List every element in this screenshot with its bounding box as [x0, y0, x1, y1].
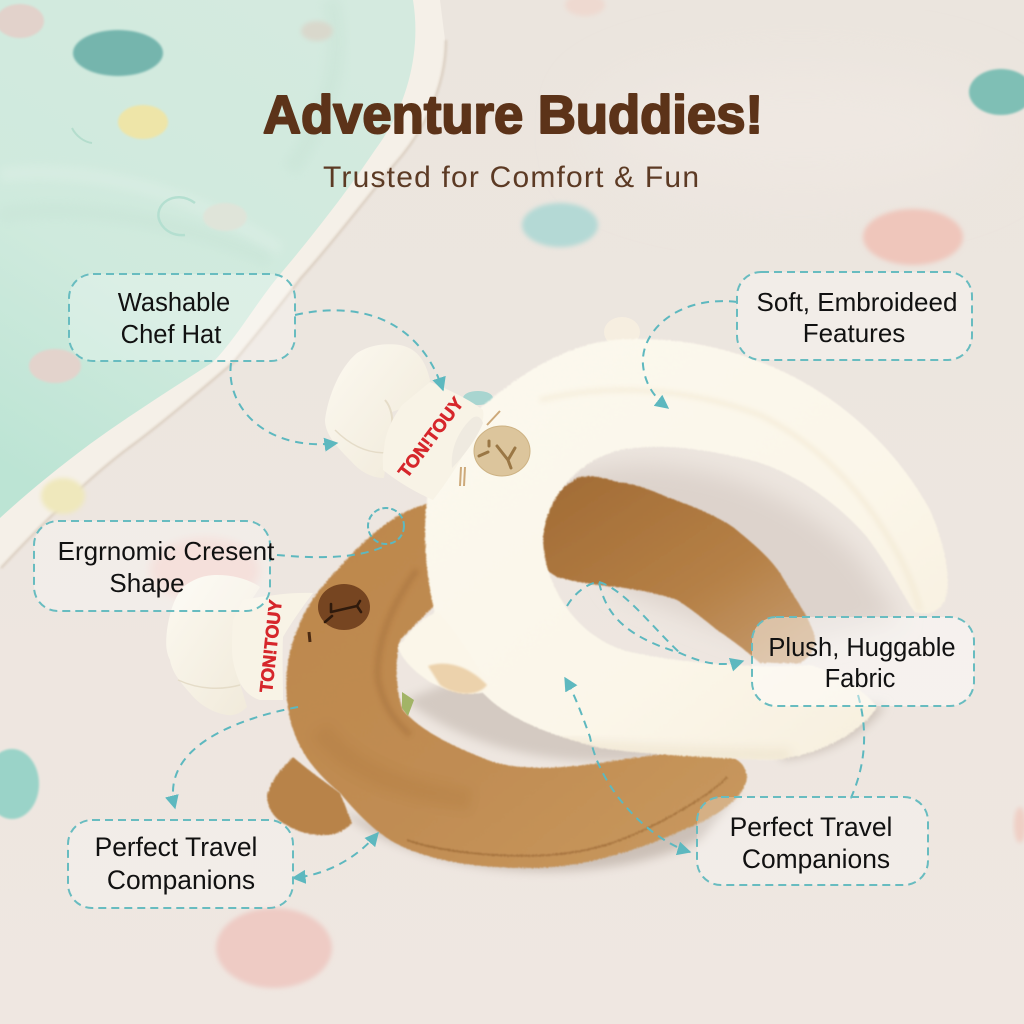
brown face patch: [318, 584, 370, 630]
callout: Ergrnomic Cresent Shape: Ergrnomic Cresent: [58, 536, 275, 566]
floor shadows under plush: [340, 464, 900, 871]
connector arrows: [173, 301, 864, 878]
callout: Perfect Travel Companions (right): [697, 797, 928, 885]
green tag: [402, 692, 414, 716]
callout: Plush, Huggable Fabric: Fabric: [825, 665, 896, 693]
callout: Soft, Embroideed Features: Features: [803, 318, 905, 348]
cream ear: [398, 612, 490, 694]
callout: Soft, Embroideed Features: Soft, Embroideed: [757, 287, 957, 317]
callout: Washable Chef Hat: [69, 274, 295, 361]
callout: Washable Chef Hat: Washable: [118, 289, 230, 317]
callout: Perfect Travel Companions (left): [68, 820, 293, 908]
mint blanket: [0, 0, 446, 568]
callout: Perfect Travel Companions (left): Perfect Travel: [95, 832, 257, 862]
brown front arm: [286, 500, 747, 868]
callout: Perfect Travel Companions (left): Companions: [107, 865, 255, 895]
chef hat: brown plush: TON!TOUY: [256, 599, 286, 693]
small cream tail nub: [604, 317, 640, 347]
chef hat: cream plush: TON!TOUY: [394, 394, 467, 481]
brown ear: [267, 757, 352, 835]
subtitle: Trusted for Comfort & Fun: [323, 161, 699, 194]
callout: Soft, Embroideed Features: [737, 272, 972, 360]
title: Adventure Buddies!: [263, 85, 763, 145]
callout: Ergrnomic Cresent Shape: Shape: [109, 568, 185, 598]
callout: Plush, Huggable Fabric: [752, 617, 974, 706]
chef hat: brown plush: [166, 575, 313, 715]
callout: Perfect Travel Companions (right): Perfect Travel: [730, 812, 892, 842]
brown back arm: [530, 476, 815, 663]
callout: Perfect Travel Companions (right): Companions: [742, 844, 890, 874]
callout: Ergrnomic Cresent Shape: [34, 521, 275, 611]
cream face patch: [474, 426, 530, 476]
brown plush ring: [267, 476, 815, 868]
cream plush ring: [398, 339, 948, 760]
callout: Plush, Huggable Fabric: Plush, Huggable: [768, 634, 956, 662]
chef hat: cream plush: [325, 344, 483, 500]
callout: Washable Chef Hat: Chef Hat: [121, 321, 221, 349]
